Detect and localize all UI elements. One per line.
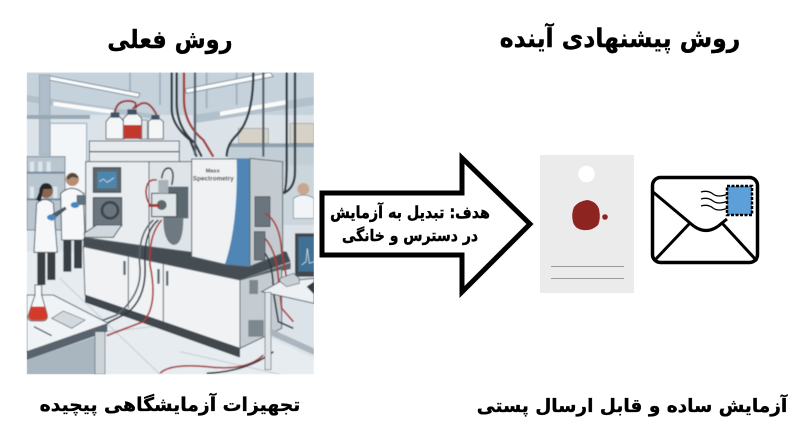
blood spot	[572, 200, 608, 230]
lab worker right	[297, 183, 309, 195]
arrow with goal label	[322, 158, 530, 292]
illustration: mass spectrometry lab	[27, 72, 314, 374]
side table and monitor	[262, 233, 314, 370]
icon: envelope with stamp	[652, 178, 758, 262]
foreground table and flask	[27, 285, 108, 374]
instrument	[84, 141, 283, 267]
arrow text line 1: هدف: تبدیل به آزمایش	[330, 202, 490, 222]
overhead tubes	[172, 72, 295, 193]
bench	[83, 233, 291, 358]
instrument: Mass	[206, 168, 220, 174]
cables	[95, 213, 293, 373]
floor	[27, 252, 314, 374]
stamp	[727, 186, 752, 215]
worker woman	[34, 183, 67, 285]
caption: simple mailable test: آزمایش ساده و قابل ارسال پستی	[477, 394, 788, 417]
ion source	[163, 187, 188, 218]
ceiling and walls	[27, 72, 314, 115]
blood sample card	[540, 155, 634, 293]
arrow text line 2: در دسترس و خانگی	[342, 226, 478, 245]
instrument: Spectrometry	[193, 176, 234, 183]
worker man	[61, 173, 87, 272]
heading: proposed future method: روش پیشنهادی آینده	[500, 22, 740, 53]
caption: complex lab equipment: تجهیزات آزمایشگاهی پیچیده	[40, 392, 300, 416]
bottles	[106, 101, 163, 139]
heading: current method: روش فعلی	[107, 25, 233, 54]
